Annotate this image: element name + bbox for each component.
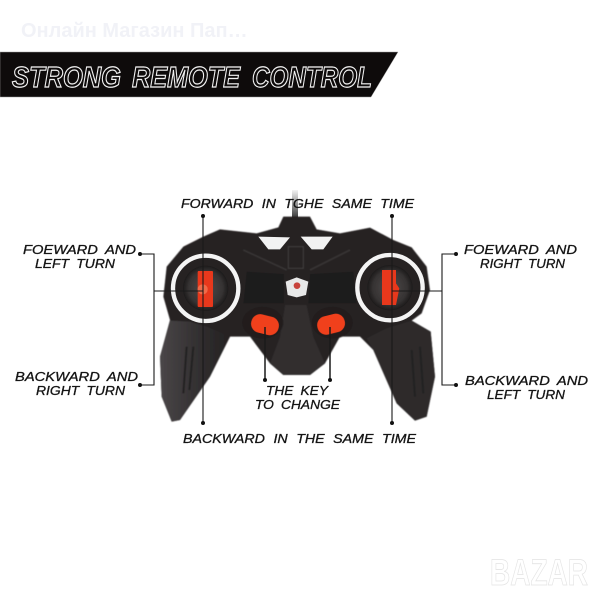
label: backward and right turn: BACKWARD AND [15, 370, 138, 384]
label: forward and left turn: FOEWARD AND [23, 243, 136, 257]
label: forward and right turn: FOEWARD AND [464, 243, 577, 257]
title text: STRONG [12, 62, 121, 94]
centre column [270, 305, 325, 375]
title text: CONTROL [252, 62, 372, 94]
left stick wheel [173, 256, 238, 321]
label: backward and left turn: BACKWARD AND [465, 374, 588, 388]
title banner [0, 52, 398, 97]
label: backward: BACKWARD IN THE SAME TIME [183, 432, 417, 446]
label: forward: FORWARD IN TGHE SAME TIME [181, 197, 415, 211]
right red button [315, 312, 347, 337]
watermark: shop name: Онлайн Магазин Пап… [21, 20, 248, 42]
title text: REMOTE [132, 62, 241, 94]
label: backward and right turn [15, 370, 138, 398]
right grip [367, 321, 435, 421]
left grip [160, 321, 230, 422]
left button housing [242, 307, 283, 339]
label: the key to change: THE KEY [266, 384, 330, 398]
controller [160, 190, 435, 422]
label: forward and right turn [464, 243, 577, 271]
right button housing [312, 307, 353, 339]
title text [12, 62, 372, 94]
callout lines [140, 216, 456, 423]
controller body [160, 217, 435, 422]
label: backward and left turn: LEFT TURN [487, 388, 566, 402]
centre emblem [286, 277, 308, 297]
left red button [249, 312, 281, 337]
label: backward and left turn [465, 374, 588, 402]
top white marks [258, 237, 333, 249]
label: forward and right turn: RIGHT TURN [480, 257, 566, 271]
label: backward and right turn: RIGHT TURN [36, 384, 126, 398]
callout dots [138, 214, 458, 425]
label: forward and left turn [23, 243, 136, 271]
label: forward and left turn: LEFT TURN [35, 257, 116, 271]
right stick wheel [357, 255, 423, 320]
cable [292, 190, 298, 220]
label: the key to change [255, 384, 341, 412]
label: the key to change: TO CHANGE [255, 398, 341, 412]
